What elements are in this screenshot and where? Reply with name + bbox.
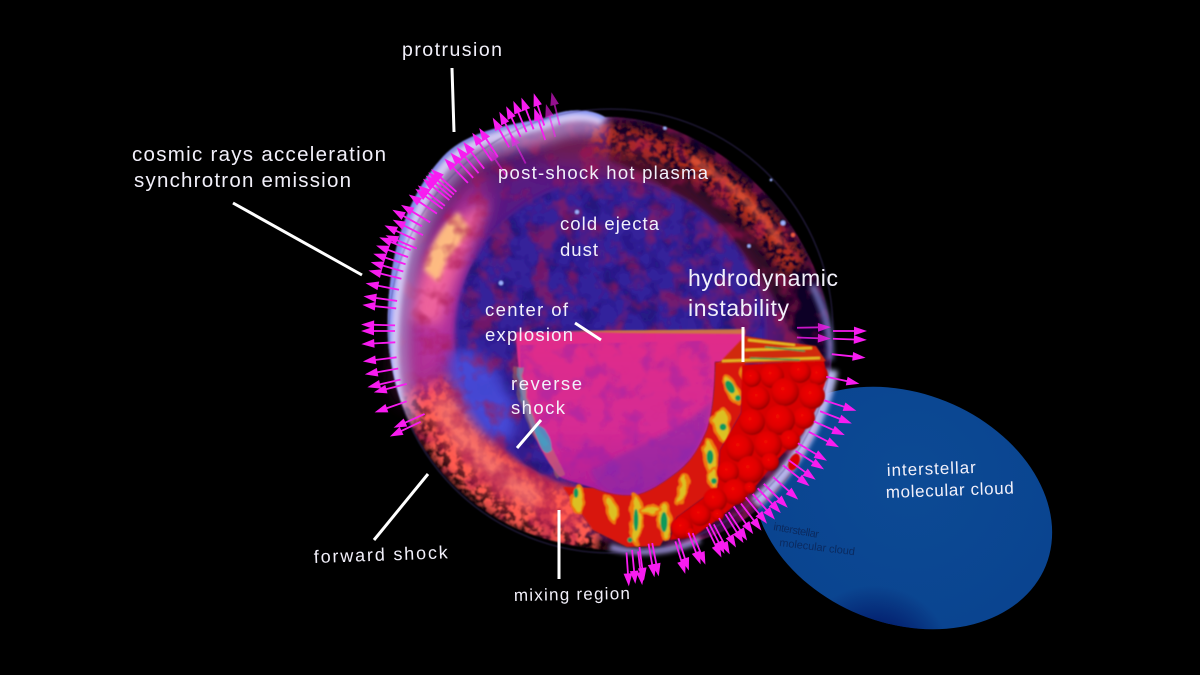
- thin chord strip: [560, 329, 745, 334]
- inner hemisphere (unshocked ejecta): [516, 330, 745, 496]
- label: center of explosion: [485, 299, 573, 345]
- label: reverse shock: reverse: [511, 373, 582, 394]
- interstellar molecular cloud ellipse: [717, 344, 1089, 672]
- label: faint reflected cloud text: molecular cloud: [779, 537, 856, 558]
- upper right rim: [812, 285, 830, 360]
- upper right dark outer zone: [610, 118, 832, 370]
- reverse shock streak: [517, 365, 562, 478]
- leader line: center of explosion: [575, 323, 601, 340]
- label: faint reflected cloud text: interstellar: [772, 521, 820, 541]
- label: cosmic rays acceleration, synchrotron emission: synchrotron emission: [134, 169, 351, 192]
- lower left black outer zone: [404, 397, 678, 551]
- orange patch: [424, 212, 470, 282]
- red clumps and cut surface: [560, 329, 828, 540]
- blue outer edge: [388, 110, 605, 400]
- label: hydrodynamic instability: instability: [688, 295, 790, 321]
- right rim: [755, 370, 832, 503]
- green mixing cores: [574, 379, 741, 542]
- lower left red speckle band: [425, 385, 600, 528]
- wide pale band: [394, 120, 605, 425]
- ejecta dark mottling: [450, 175, 770, 495]
- hemisphere darker lower band: [590, 400, 712, 496]
- cold ejecta blue sphere: [455, 180, 765, 490]
- yellow mixing streaks: [571, 365, 757, 544]
- leader line: hydrodynamic instability: [742, 327, 744, 362]
- label: reverse shock: [511, 373, 582, 418]
- label: mixing region: mixing region: [514, 584, 630, 605]
- label: post-shock hot plasma: post-shock hot plasma: [498, 162, 709, 183]
- outflow arrows: right and bottom: [622, 323, 867, 587]
- clumps: [671, 361, 828, 539]
- label: cold ejecta dust: dust: [560, 239, 598, 260]
- lavender rim: [388, 110, 605, 425]
- label: protrusion: protrusion: [402, 39, 502, 61]
- bottom rim: [610, 540, 700, 552]
- label: interstellar molecular cloud: [885, 458, 1014, 502]
- leader line: reverse shock: [517, 420, 541, 448]
- stars: [499, 126, 795, 285]
- leader line: forward shock: [374, 474, 428, 540]
- strip yellow: [722, 340, 820, 361]
- label: cosmic rays acceleration, synchrotron emission: cosmic rays acceleration: [132, 143, 386, 166]
- label: interstellar molecular cloud: interstellar: [886, 458, 976, 480]
- leader line: protrusion: [452, 68, 454, 132]
- clump base: [670, 360, 827, 540]
- red crescent: [563, 362, 745, 547]
- label: hydrodynamic instability: [688, 265, 838, 321]
- label: cold ejecta dust: [560, 213, 660, 260]
- label: cosmic rays acceleration, synchrotron emission: [132, 143, 386, 192]
- label: faint reflected cloud text: [772, 521, 856, 558]
- shell base: [388, 110, 832, 551]
- left purple pink plasma: [402, 165, 490, 400]
- bright band: [393, 115, 603, 405]
- detached clump: [786, 452, 802, 472]
- hemisphere mottling: [520, 340, 735, 493]
- faint shell outline: [389, 109, 833, 553]
- mottled red texture: [385, 110, 835, 550]
- label: reverse shock: shock: [511, 397, 566, 418]
- label: hydrodynamic instability: hydrodynamic: [688, 265, 838, 291]
- strip green: [750, 347, 805, 360]
- ejecta lighter zone: [435, 338, 529, 452]
- outflow arrows: left and top: [361, 91, 564, 440]
- label: cold ejecta dust: cold ejecta: [560, 213, 660, 234]
- pink glow near left rim: [412, 200, 488, 325]
- leader line: cosmic rays: [233, 203, 362, 275]
- upper right red speckle band: [540, 138, 795, 300]
- label: center of explosion: explosion: [485, 324, 573, 345]
- mixing region cross-section: [563, 362, 757, 547]
- leader line: mixing region: [558, 510, 560, 579]
- label: center of explosion: center of: [485, 299, 569, 320]
- cut surface strip: [716, 336, 826, 364]
- supernova remnant shell: [384, 109, 835, 560]
- label: interstellar molecular cloud: molecular cloud: [885, 479, 1014, 502]
- label: forward shock: forward shock: [313, 542, 449, 567]
